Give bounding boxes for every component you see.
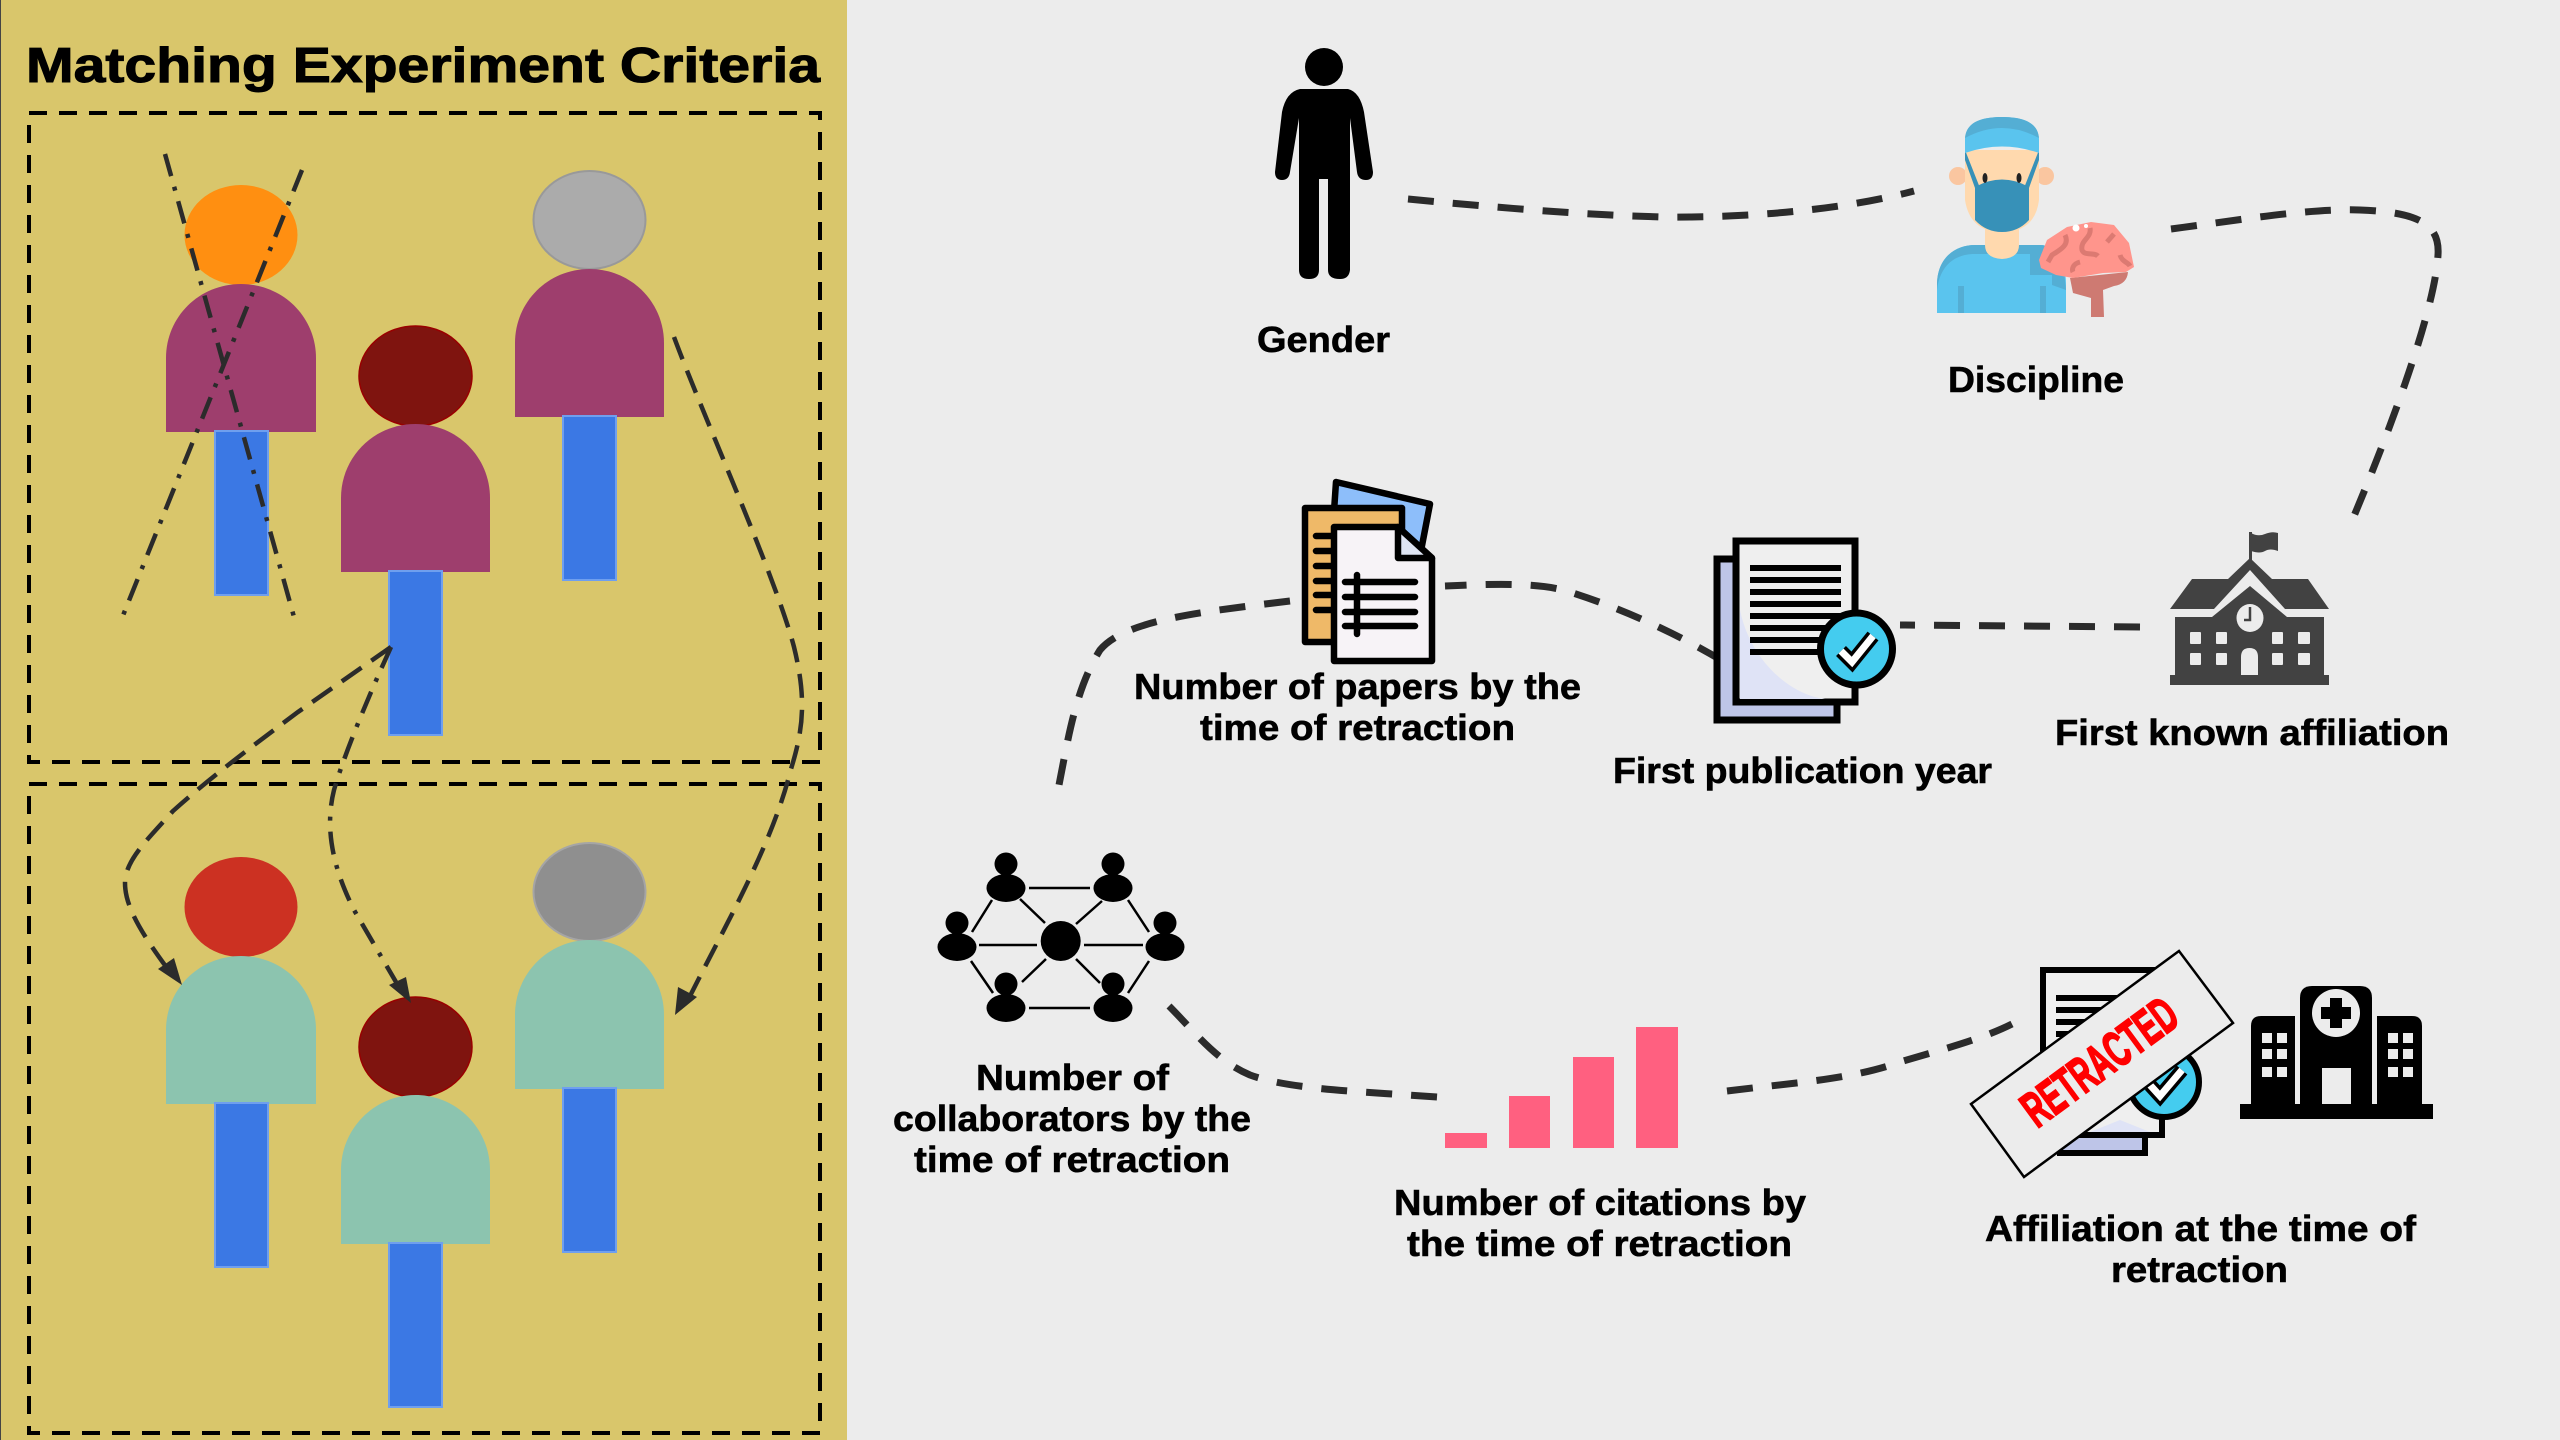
label: affiliation at time of retraction: Affiliation at the time of bbox=[1985, 1208, 2417, 1249]
title: Matching Experiment Criteria bbox=[26, 39, 821, 93]
banner: retracted bbox=[1971, 951, 2233, 1177]
label: number of papers: Number of papers by the bbox=[1134, 666, 1581, 707]
label: gender: Gender bbox=[1257, 319, 1390, 360]
icon: gender person bbox=[1275, 48, 1373, 279]
path: discipline to first affiliation bbox=[2171, 210, 2438, 516]
label: number of collaborators: time of retraction bbox=[914, 1139, 1230, 1180]
panel: matching experiment criteria bbox=[0, 0, 847, 1440]
top dashed box bbox=[29, 113, 820, 762]
arrow: gray to gray match bbox=[674, 337, 802, 1015]
icon: publication document with check bbox=[1717, 541, 1892, 720]
icon: retracted document bbox=[1971, 951, 2233, 1177]
person: red head, matched bbox=[166, 857, 316, 1267]
label: discipline: Discipline bbox=[1948, 359, 2124, 400]
label: number of citations bbox=[1394, 1182, 1806, 1264]
arrow: dark red to red match bbox=[125, 647, 391, 985]
path: publication year to papers bbox=[1445, 584, 1721, 660]
label: number of papers bbox=[1134, 666, 1581, 748]
chart: citation bars bbox=[1445, 1027, 1678, 1148]
person: gray head, matched bbox=[515, 843, 664, 1252]
person: orange head, excluded bbox=[166, 185, 316, 595]
path: citations to retraction bbox=[1727, 1024, 2012, 1091]
label: number of collaborators bbox=[893, 1057, 1251, 1180]
label: number of papers: time of retraction bbox=[1200, 707, 1515, 748]
path: first affiliation to publication year bbox=[1900, 625, 2140, 627]
path: collaborators to citations bbox=[1169, 1006, 1437, 1097]
banner: retracted: RETRACTED bbox=[2010, 986, 2189, 1138]
label: first publication year: First publication year bbox=[1613, 750, 1992, 791]
person: gray head, top bbox=[515, 171, 664, 580]
path: papers to collaborators bbox=[1058, 601, 1290, 790]
label: affiliation at time of retraction bbox=[1985, 1208, 2417, 1290]
arrow: dark red to dark red match bbox=[330, 647, 411, 1003]
label: number of citations: the time of retraction bbox=[1407, 1223, 1792, 1264]
label: number of collaborators: Number of bbox=[976, 1057, 1170, 1098]
person: dark red head, matched bbox=[341, 997, 490, 1407]
label: number of citations: Number of citations by bbox=[1394, 1182, 1806, 1223]
label: number of collaborators: collaborators by the bbox=[893, 1098, 1251, 1139]
label: affiliation at time of retraction: retraction bbox=[2111, 1249, 2288, 1290]
path: gender to discipline bbox=[1408, 191, 1914, 217]
bottom dashed box bbox=[29, 784, 820, 1433]
icon: school building bbox=[2170, 532, 2329, 685]
label: first known affiliation: First known affiliation bbox=[2055, 712, 2449, 753]
icon: surgeon with brain bbox=[1937, 117, 2134, 317]
icon: stack of papers bbox=[1305, 482, 1432, 661]
person: dark red head, top bbox=[341, 326, 490, 735]
icon: hospital bbox=[2240, 986, 2433, 1119]
cross mark over excluded person bbox=[122, 154, 302, 618]
icon: collaborator network bbox=[938, 852, 1184, 1022]
